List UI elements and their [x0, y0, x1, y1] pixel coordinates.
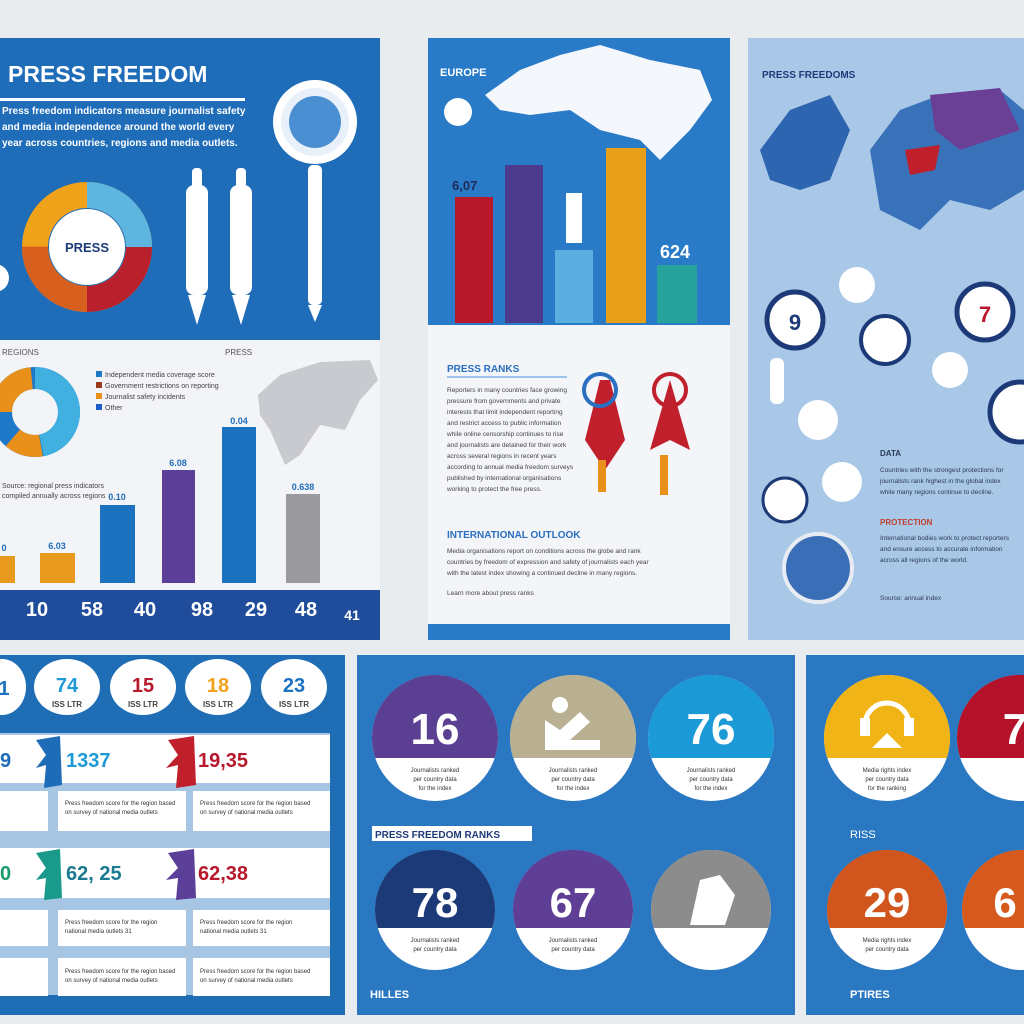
text block: [446, 387, 574, 493]
panel: more ranks: 29: [864, 879, 910, 926]
text block: according to annual media freedom surveys: [447, 464, 574, 471]
panel: bar chart: Source: regional press indicators: [2, 483, 104, 490]
rank circles bottom row: 67: [550, 879, 596, 926]
text blocks: across all regions of the world.: [880, 557, 968, 564]
rank circles top row: per country data: [551, 777, 595, 783]
panel: press freedom ranks: [357, 655, 795, 1015]
bars: [452, 148, 697, 323]
legend: [96, 371, 219, 412]
donut chart: press: [35, 195, 139, 299]
rank circles top row: Journalists ranked: [549, 768, 597, 774]
panel: world bar chart: [428, 38, 730, 640]
bars: 0.638: [292, 482, 314, 492]
flags and numbers: 62, 25: [66, 863, 122, 885]
axis band with values: 41: [344, 607, 360, 623]
rank circles top row: [372, 675, 774, 801]
stat circles: 7: [979, 302, 991, 327]
table text: Press freedom score for the region based: [200, 969, 310, 975]
panel: more ranks: Media rights index: [863, 768, 911, 774]
panel: more ranks: [806, 655, 1024, 1015]
rank circles top row: for the index: [556, 786, 590, 792]
rank circles top row: per country data: [413, 777, 457, 783]
rank circles bottom row: Journalists ranked: [411, 938, 459, 944]
table text: on survey of national media outlets: [200, 810, 293, 816]
rank circles top row: 76: [687, 705, 735, 754]
text blocks: and ensure access to accurate information: [880, 546, 1003, 553]
bars: 0.04: [230, 416, 248, 426]
rank circles top row: for the index: [418, 786, 452, 792]
panel: bar chart: REGIONS: [2, 348, 39, 357]
table text: national media outlets 31: [65, 929, 132, 935]
map: world colored: [760, 88, 1024, 230]
bars: 624: [660, 242, 690, 262]
table text: on survey of national media outlets: [65, 810, 158, 816]
table text: Press freedom score for the region based: [65, 801, 175, 807]
rank circles top row: Journalists ranked: [411, 768, 459, 774]
text blocks: PROTECTION: [880, 518, 933, 527]
rank circles bottom row: 78: [412, 879, 458, 926]
title: PRESS FREEDOM: [8, 61, 207, 87]
icon: headphones: [865, 703, 909, 725]
legend: Other: [105, 405, 123, 412]
panel: world bar chart: with the latest index showing a continued decline in many regions.: [446, 570, 637, 577]
stat circles row: 15: [132, 675, 154, 697]
flags and numbers: 9: [0, 750, 11, 772]
rank circles bottom row: per country data: [551, 947, 595, 953]
text blocks: Source: annual index: [880, 595, 942, 602]
panel: more ranks: 6: [993, 879, 1017, 926]
panel: press freedom map: PRESS FREEDOMS: [762, 70, 856, 81]
panel: more ranks: PTIRES: [850, 989, 890, 1001]
heading: press ranks: PRESS RANKS: [447, 364, 520, 375]
icon: magnifying glass: [277, 84, 353, 322]
panel: more ranks: for the ranking: [868, 786, 906, 792]
panel: more ranks: per country data: [865, 947, 909, 953]
flags and numbers: [0, 736, 248, 900]
bars: 0.10: [108, 492, 126, 502]
rank circles top row: 16: [411, 705, 459, 754]
text block: and journalists are detained for their work: [447, 442, 567, 449]
panel: bar chart: [0, 340, 380, 640]
panel: more ranks: RISS: [850, 829, 876, 841]
text block: published by international organisations: [447, 475, 562, 482]
panel: press freedom overview: [0, 38, 380, 340]
legend: Independent media coverage score: [105, 372, 215, 379]
table text: Press freedom score for the region: [200, 920, 292, 926]
table text: [65, 801, 310, 984]
icon: ribbons: [584, 374, 690, 495]
table rows: [0, 733, 330, 996]
stat circles row: ISS LTR: [203, 700, 233, 709]
map: gray world: [258, 360, 378, 465]
label: bottom: HILLES: [370, 989, 409, 1001]
table text: Press freedom score for the region: [65, 920, 157, 926]
map: world white: [485, 45, 712, 160]
text block: Reporters in many countries face growing: [447, 387, 567, 394]
text block: interests that limit independent reporting: [447, 409, 563, 416]
axis band with values: 10: [26, 599, 48, 621]
table text: on survey of national media outlets: [200, 978, 293, 984]
label: press freedom ranks: [372, 826, 532, 841]
panel: statistics table: [0, 655, 345, 1015]
text blocks: International bodies work to protect reporters: [880, 535, 1010, 542]
panel: world bar chart: Learn more about press ranks: [447, 590, 534, 597]
flags and numbers: 19,35: [198, 750, 248, 772]
text block: across several regions in recent years: [447, 453, 557, 460]
rank circles top row: for the index: [694, 786, 728, 792]
rank circles top row: per country data: [689, 777, 733, 783]
table text: Press freedom score for the region based: [65, 969, 175, 975]
flags and numbers: 1337: [66, 750, 110, 772]
intro text: Press freedom indicators measure journalist safety: [2, 106, 246, 117]
bars: 6.03: [48, 541, 66, 551]
stat circles row: ISS LTR: [128, 700, 158, 709]
rank circles bottom row: [375, 850, 771, 970]
table text: on survey of national media outlets: [65, 978, 158, 984]
text blocks: while many regions continue to decline.: [879, 489, 994, 496]
stat circles: [763, 267, 1024, 602]
panel: bar chart: PRESS: [225, 348, 252, 357]
panel: bar chart: compiled annually across regions: [2, 493, 106, 500]
donut chart: press: PRESS: [65, 240, 109, 255]
flags and numbers: 62,38: [198, 863, 248, 885]
intro text: and media independence around the world every: [2, 122, 235, 133]
table text: Press freedom score for the region based: [200, 801, 310, 807]
stat circles row: [0, 659, 327, 715]
panel: more ranks: per country data: [865, 777, 909, 783]
bars: [0, 416, 320, 583]
text block: while online censorship continues to rise: [446, 431, 564, 438]
text blocks: journalists rank highest in the global index: [879, 478, 1001, 485]
legend: Government restrictions on reporting: [105, 383, 219, 390]
axis band with values: 29: [245, 599, 267, 621]
stat circles row: 18: [207, 675, 229, 697]
stat circles row: ISS LTR: [279, 700, 309, 709]
axis band with values: 58: [81, 599, 103, 621]
stat circles row: 74: [56, 675, 79, 697]
axis band with values: 40: [134, 599, 156, 621]
text blocks: Countries with the strongest protections for: [880, 467, 1004, 474]
text block: and restrict access to public information: [447, 420, 562, 427]
rank circles bottom row: Journalists ranked: [549, 938, 597, 944]
panel: world bar chart: EUROPE: [440, 67, 486, 79]
flags and numbers: 0: [0, 863, 11, 885]
rank circles bottom row: per country data: [413, 947, 457, 953]
panel: world bar chart: countries by freedom of expression and safety of journalists each year: [447, 559, 649, 566]
label: press freedom ranks: PRESS FREEDOM RANKS: [375, 830, 500, 841]
bars: 6,07: [452, 178, 477, 193]
bars: 0: [1, 543, 7, 553]
icon: pens: [186, 168, 252, 325]
heading: international outlook: INTERNATIONAL OUTLOOK: [447, 530, 581, 541]
table text: national media outlets 31: [200, 929, 267, 935]
legend: Journalist safety incidents: [105, 394, 186, 401]
axis band with values: 98: [191, 599, 213, 621]
text block: pressure from governments and private: [447, 398, 561, 405]
bars: 6.08: [169, 458, 187, 468]
intro text: year across countries, regions and media outlets.: [2, 138, 238, 149]
text blocks: [879, 449, 1010, 602]
panel: world bar chart: Media organisations report on conditions across the globe and rank: [447, 548, 641, 555]
stat circles row: ISS LTR: [52, 700, 82, 709]
axis band with values: [0, 590, 380, 640]
axis band with values: 48: [295, 599, 317, 621]
text blocks: DATA: [880, 449, 901, 458]
stat circles: 9: [789, 310, 801, 335]
intro text: [2, 106, 246, 149]
stat circles row: 23: [283, 675, 305, 697]
rank circles top row: Journalists ranked: [687, 768, 735, 774]
panel: press freedom map: [748, 38, 1024, 640]
panel: more ranks: Media rights index: [863, 938, 911, 944]
donut chart small: [0, 373, 74, 451]
text block: working to protect the free press.: [446, 486, 542, 493]
